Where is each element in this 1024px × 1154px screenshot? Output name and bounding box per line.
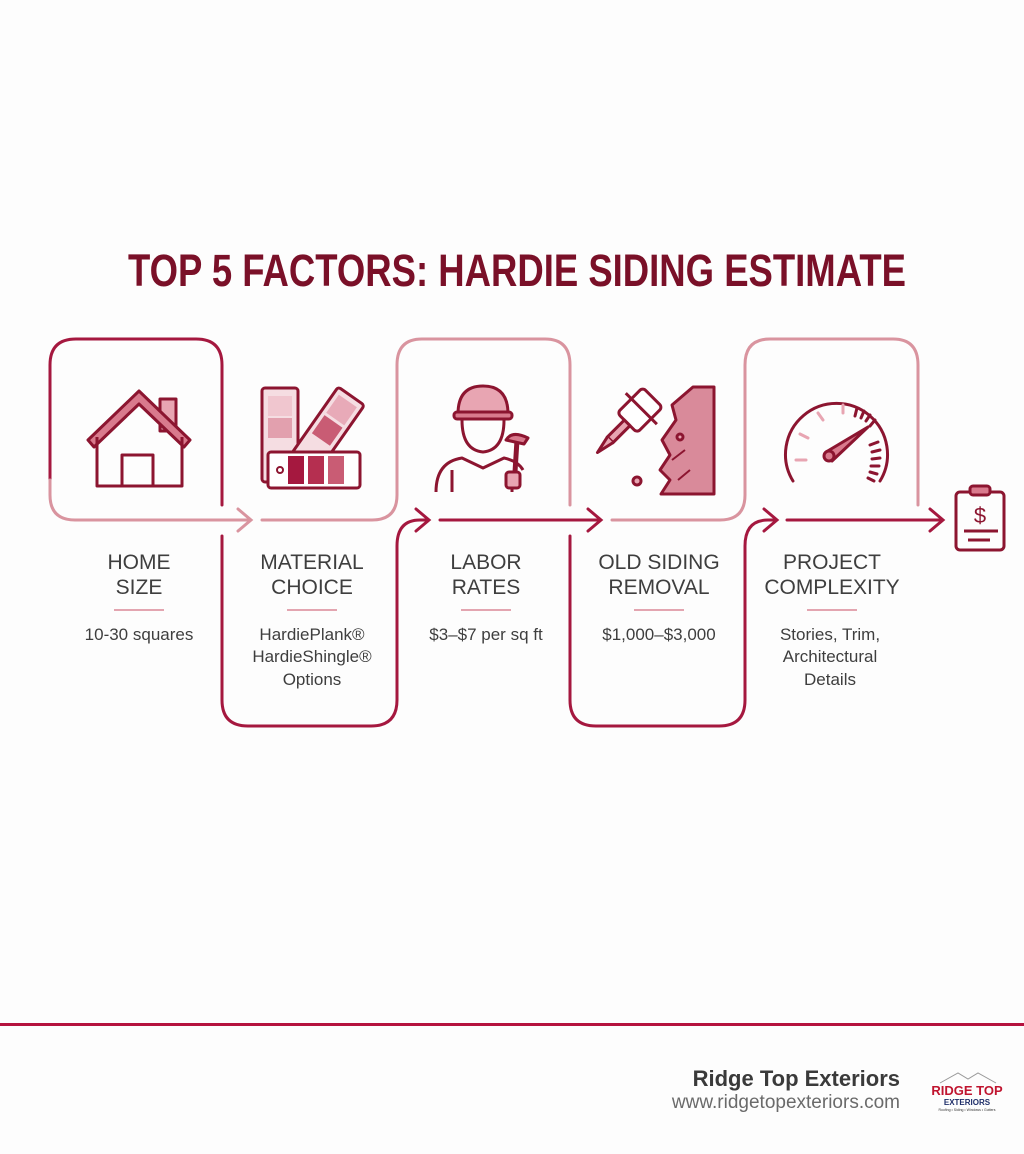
factor 3 text [429,551,543,644]
flow path [50,339,943,726]
factor 1 text: 10-30 squares [85,625,193,644]
footer company name: Ridge Top Exteriors [693,1066,900,1091]
icon: estimate clipboard: $ [974,503,986,528]
factor 3 text: LABOR [450,551,522,574]
factor 2 text: Options [283,670,341,689]
factor 4 text [598,551,720,644]
icon: estimate clipboard [956,486,1004,550]
factor 2 text: MATERIAL [260,551,364,574]
icon: gauge [786,403,888,481]
factor 4 text: OLD SIDING [598,551,720,574]
factor 1 text [85,551,193,644]
factor 5 text [764,551,900,689]
factor 1 text: HOME [108,551,170,574]
factor 4 text: $1,000–$3,000 [602,625,716,644]
logo: EXTERIORS [944,1098,991,1107]
footer company name [671,1066,900,1113]
icon: swatches [262,387,364,488]
factor 3 text: RATES [452,576,520,599]
factor 1 text: SIZE [116,576,162,599]
icon: house [88,391,190,486]
factor 3 text: $3–$7 per sq ft [429,625,543,644]
logo: Roofing • Siding • Windows • Gutters [939,1108,996,1112]
factor 5 text: Stories, Trim, [780,625,880,644]
factor 5 text: Details [804,670,856,689]
factor 2 text: CHOICE [271,576,353,599]
factor 4 text: REMOVAL [608,576,710,599]
logo [931,1073,1003,1112]
factor 5 text: COMPLEXITY [764,576,900,599]
footer company name: www.ridgetopexteriors.com [671,1092,900,1113]
factor 2 text: HardieShingle® [252,647,372,666]
icon: worker [436,386,528,492]
icon: jackhammer [582,382,714,494]
factor 5 text: PROJECT [783,551,881,574]
logo: RIDGE TOP [931,1083,1003,1098]
factor 5 text: Architectural [783,647,877,666]
factor 2 text [252,551,372,689]
factor 2 text: HardiePlank® [259,625,365,644]
footer rule [0,1023,1024,1026]
